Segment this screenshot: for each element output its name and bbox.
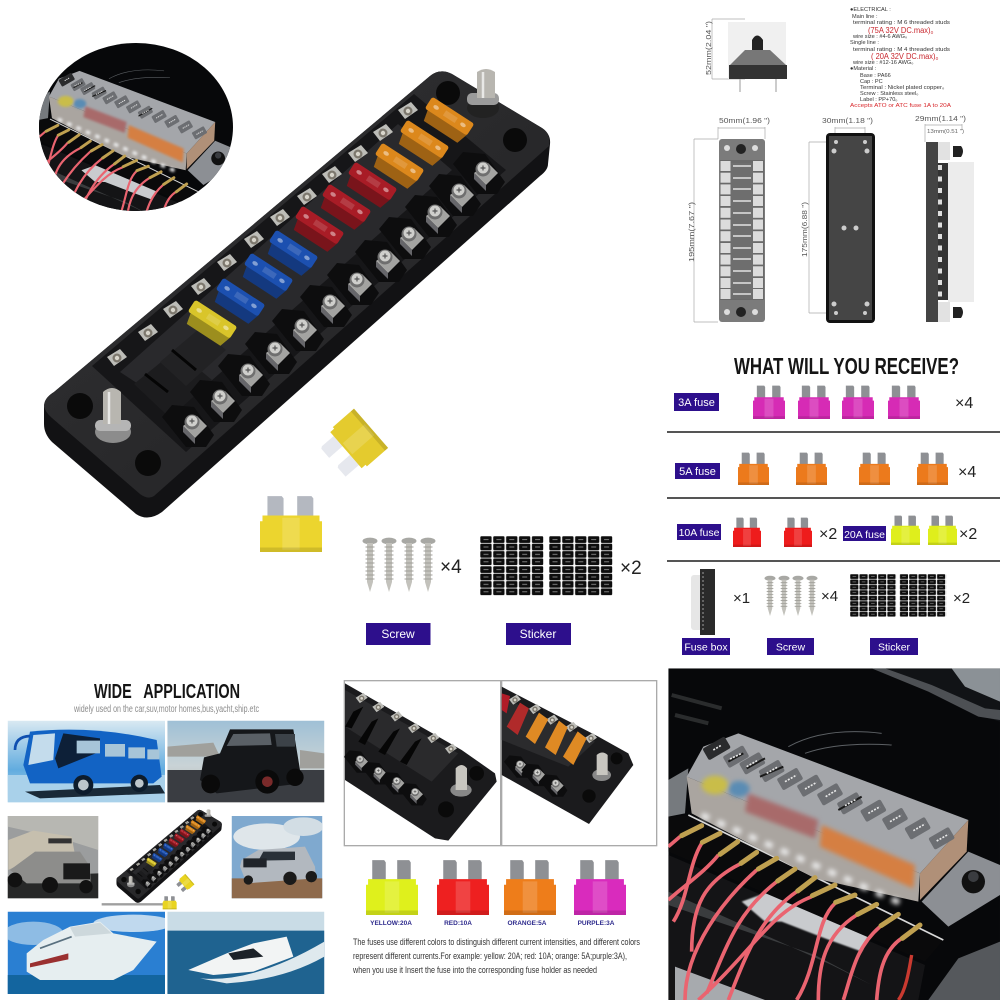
row: 3A fuses: 3A fuse xyxy=(678,397,715,409)
fuse color description: The fuses use different colors to distinguish different current intensities, and different colors xyxy=(353,937,640,948)
inset photo: covered fuse box in engine bay xyxy=(39,43,233,211)
row: 10A and 20A fuses: 10A fuse xyxy=(679,527,720,539)
row: 3A fuses xyxy=(674,386,973,419)
item: screws xyxy=(764,576,838,655)
diagram: side cap dimension xyxy=(704,19,787,92)
specifications text: Main line : xyxy=(852,14,878,20)
fuse color key: red: RED:10A xyxy=(444,920,472,927)
specifications text: Terminal : Nickel plated copper。 xyxy=(860,85,948,91)
fuse color key: yellow: YELLOW:20A xyxy=(370,920,412,927)
product photo: 12-way fuse block xyxy=(44,69,550,518)
label: sticker xyxy=(506,623,571,645)
specifications text: Label : PP+70。 xyxy=(860,97,901,103)
diagram: back view: 30mm(1.18 ") xyxy=(822,116,874,125)
specifications text: Accepts ATO or ATC fuse 1A to 20A xyxy=(850,103,951,109)
diagram: front view: 195mm(7.67 ") xyxy=(687,201,696,262)
item: stickers: ×2 xyxy=(953,590,970,607)
label: screw xyxy=(366,623,430,645)
row: 10A and 20A fuses: 20A fuse xyxy=(844,529,885,541)
mini product xyxy=(116,809,222,903)
screws with quantity: ×4 xyxy=(440,557,462,578)
row: 5A fuses: ×4 xyxy=(958,464,976,481)
specifications text: terminal rating : M 4 threaded studs xyxy=(853,47,950,53)
specifications text: terminal rating : M 6 threaded studs xyxy=(853,20,950,26)
photo: blue bus xyxy=(8,721,165,802)
item: screws: ×4 xyxy=(821,588,838,605)
fuse color description xyxy=(352,937,640,976)
fuse color description: represent different currents.For example: yellow: 20A; red: 10A; orange: 5A;purple:3A), xyxy=(353,951,627,962)
item: fuse box xyxy=(682,569,750,655)
fuse color description: when you use it Insert the fuse into the corresponding fuse holder as needed xyxy=(352,965,597,976)
mini loose fuse and shadow xyxy=(102,874,194,909)
specifications text: Screw : Stainless steel。 xyxy=(860,91,922,97)
item: stickers: Sticker xyxy=(878,642,911,654)
row: 3A fuses: ×4 xyxy=(955,395,973,412)
row: 10A and 20A fuses: ×2 xyxy=(819,526,837,543)
row: 5A fuses: 5A fuse xyxy=(679,466,716,478)
diagram: side view: 29mm(1.14 ") xyxy=(915,114,967,123)
fuse color key: yellow xyxy=(366,860,418,927)
diagram: front view: 50mm(1.96 ") xyxy=(719,116,771,125)
diagram: front view xyxy=(687,116,771,322)
divider 3 xyxy=(667,560,1000,562)
specifications text: (75A 32V DC.max)。 xyxy=(868,26,938,35)
specifications text: ●Material : xyxy=(850,66,877,72)
photo: cruise ship xyxy=(3,912,173,994)
label: sticker: Sticker xyxy=(520,627,556,641)
photo: black SUV xyxy=(167,721,324,802)
diagram: side view xyxy=(915,114,974,322)
heading: wide application: WIDE APPLICATION xyxy=(94,681,240,703)
label: screw: Screw xyxy=(381,627,415,641)
subheading: widely used on the car,suv,motor homes,bus,yacht,ship.etc xyxy=(73,704,259,715)
photo: wired fuse box under the hood xyxy=(668,668,1000,1000)
item: fuse box: Fuse box xyxy=(684,642,728,654)
fuse color key: purple xyxy=(574,860,626,927)
fuse color key: purple: PURPLE:3A xyxy=(578,920,615,927)
specifications text: wire size : #4-6 AWG。 xyxy=(852,34,911,40)
stickers with quantity xyxy=(480,536,642,596)
diagram: back view xyxy=(800,116,875,323)
divider 1 xyxy=(667,431,1000,433)
screws with quantity xyxy=(362,538,462,592)
specifications text: ( 20A 32V DC.max)。 xyxy=(871,52,943,61)
item: screws: Screw xyxy=(776,642,805,654)
row: 5A fuses xyxy=(675,453,976,485)
row: 10A and 20A fuses xyxy=(677,516,977,547)
close-up: block with fuses installed xyxy=(502,681,657,846)
fuse color key: orange: ORANGE:5A xyxy=(507,920,547,927)
specifications text: ●ELECTRICAL : xyxy=(850,7,891,13)
diagram: back view: 175mm(6.88 ") xyxy=(800,201,809,257)
fuse color key: orange xyxy=(504,860,556,927)
specifications text: Single line : xyxy=(850,40,879,46)
specifications text: Base : PA66 xyxy=(860,73,891,79)
row: 10A and 20A fuses: ×2 xyxy=(959,526,977,543)
specifications text xyxy=(850,7,951,109)
stickers with quantity: ×2 xyxy=(620,558,642,579)
loose yellow fuse, rotated xyxy=(316,409,388,481)
close-up: empty fuse block xyxy=(344,681,501,846)
divider 2 xyxy=(667,497,1000,499)
specifications text: Cap : PC xyxy=(860,79,883,85)
item: stickers xyxy=(850,574,970,655)
loose yellow fuse, upright xyxy=(260,496,322,552)
fuse color key: red xyxy=(437,860,489,927)
specifications text: wire size : #12-16 AWG。 xyxy=(852,60,917,66)
item: fuse box: ×1 xyxy=(733,590,750,607)
photo: silver SUV xyxy=(232,816,323,898)
diagram: side view: 13mm(0.51 ") xyxy=(927,129,964,135)
photo: motor home xyxy=(8,816,98,898)
photo: yacht xyxy=(167,912,324,994)
diagram: side cap dimension: 52mm(2.04 ") xyxy=(704,20,713,75)
